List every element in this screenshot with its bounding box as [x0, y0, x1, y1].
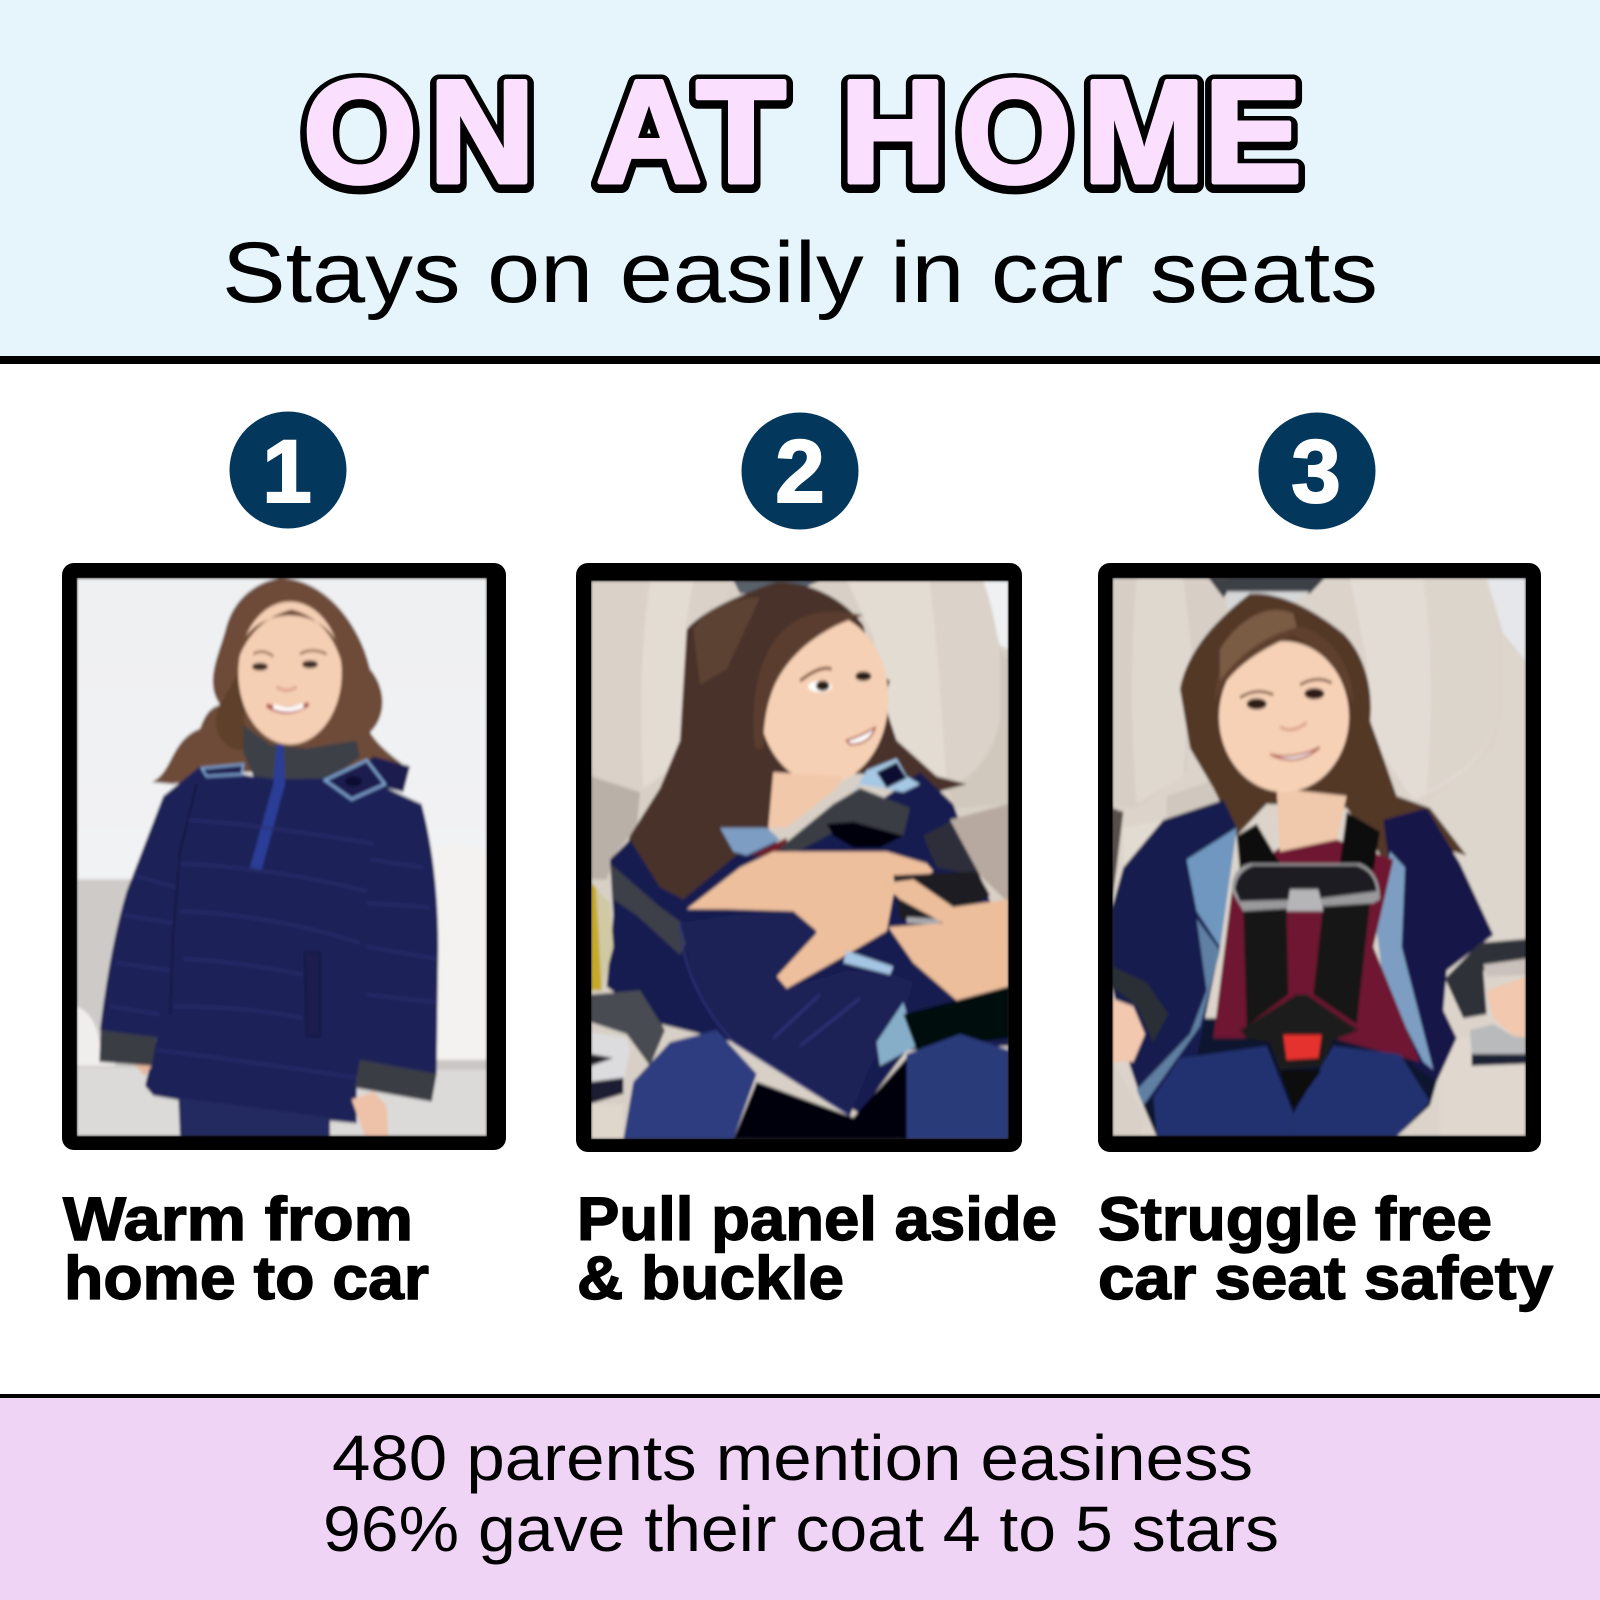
step badge 2: 2	[775, 421, 825, 521]
caption 3: car seat safety	[1098, 1244, 1553, 1312]
step badge 1: 1	[262, 421, 312, 521]
caption 3	[1098, 1185, 1553, 1312]
title: ON AT HOME	[303, 52, 1302, 215]
footer stats text: 480 parents mention easiness	[332, 1422, 1253, 1494]
subtitle: Stays on easily in car seats	[222, 225, 1378, 321]
caption 3: Struggle free	[1098, 1185, 1492, 1253]
caption 1: Warm from	[63, 1185, 413, 1253]
caption 2: & buckle	[577, 1244, 844, 1312]
caption 1	[63, 1185, 429, 1312]
caption 2	[577, 1185, 1057, 1312]
title: ON AT HOME	[303, 50, 1302, 213]
caption 1: home to car	[64, 1244, 429, 1312]
footer band	[0, 1394, 1600, 1600]
step badge 1	[230, 412, 346, 528]
header band	[0, 0, 1600, 364]
photo 2: adult hand pulling coat panel aside	[576, 563, 1022, 1152]
footer stats text	[323, 1422, 1279, 1565]
photo 3: child buckled in car seat	[1098, 563, 1541, 1152]
step badge 3: 3	[1291, 421, 1341, 521]
step badge 3	[1258, 412, 1376, 530]
step badge 2	[742, 412, 858, 530]
photo 1: child standing in navy coat	[62, 563, 506, 1150]
caption 2: Pull panel aside	[577, 1185, 1057, 1253]
footer stats text: 96% gave their coat 4 to 5 stars	[323, 1493, 1279, 1565]
